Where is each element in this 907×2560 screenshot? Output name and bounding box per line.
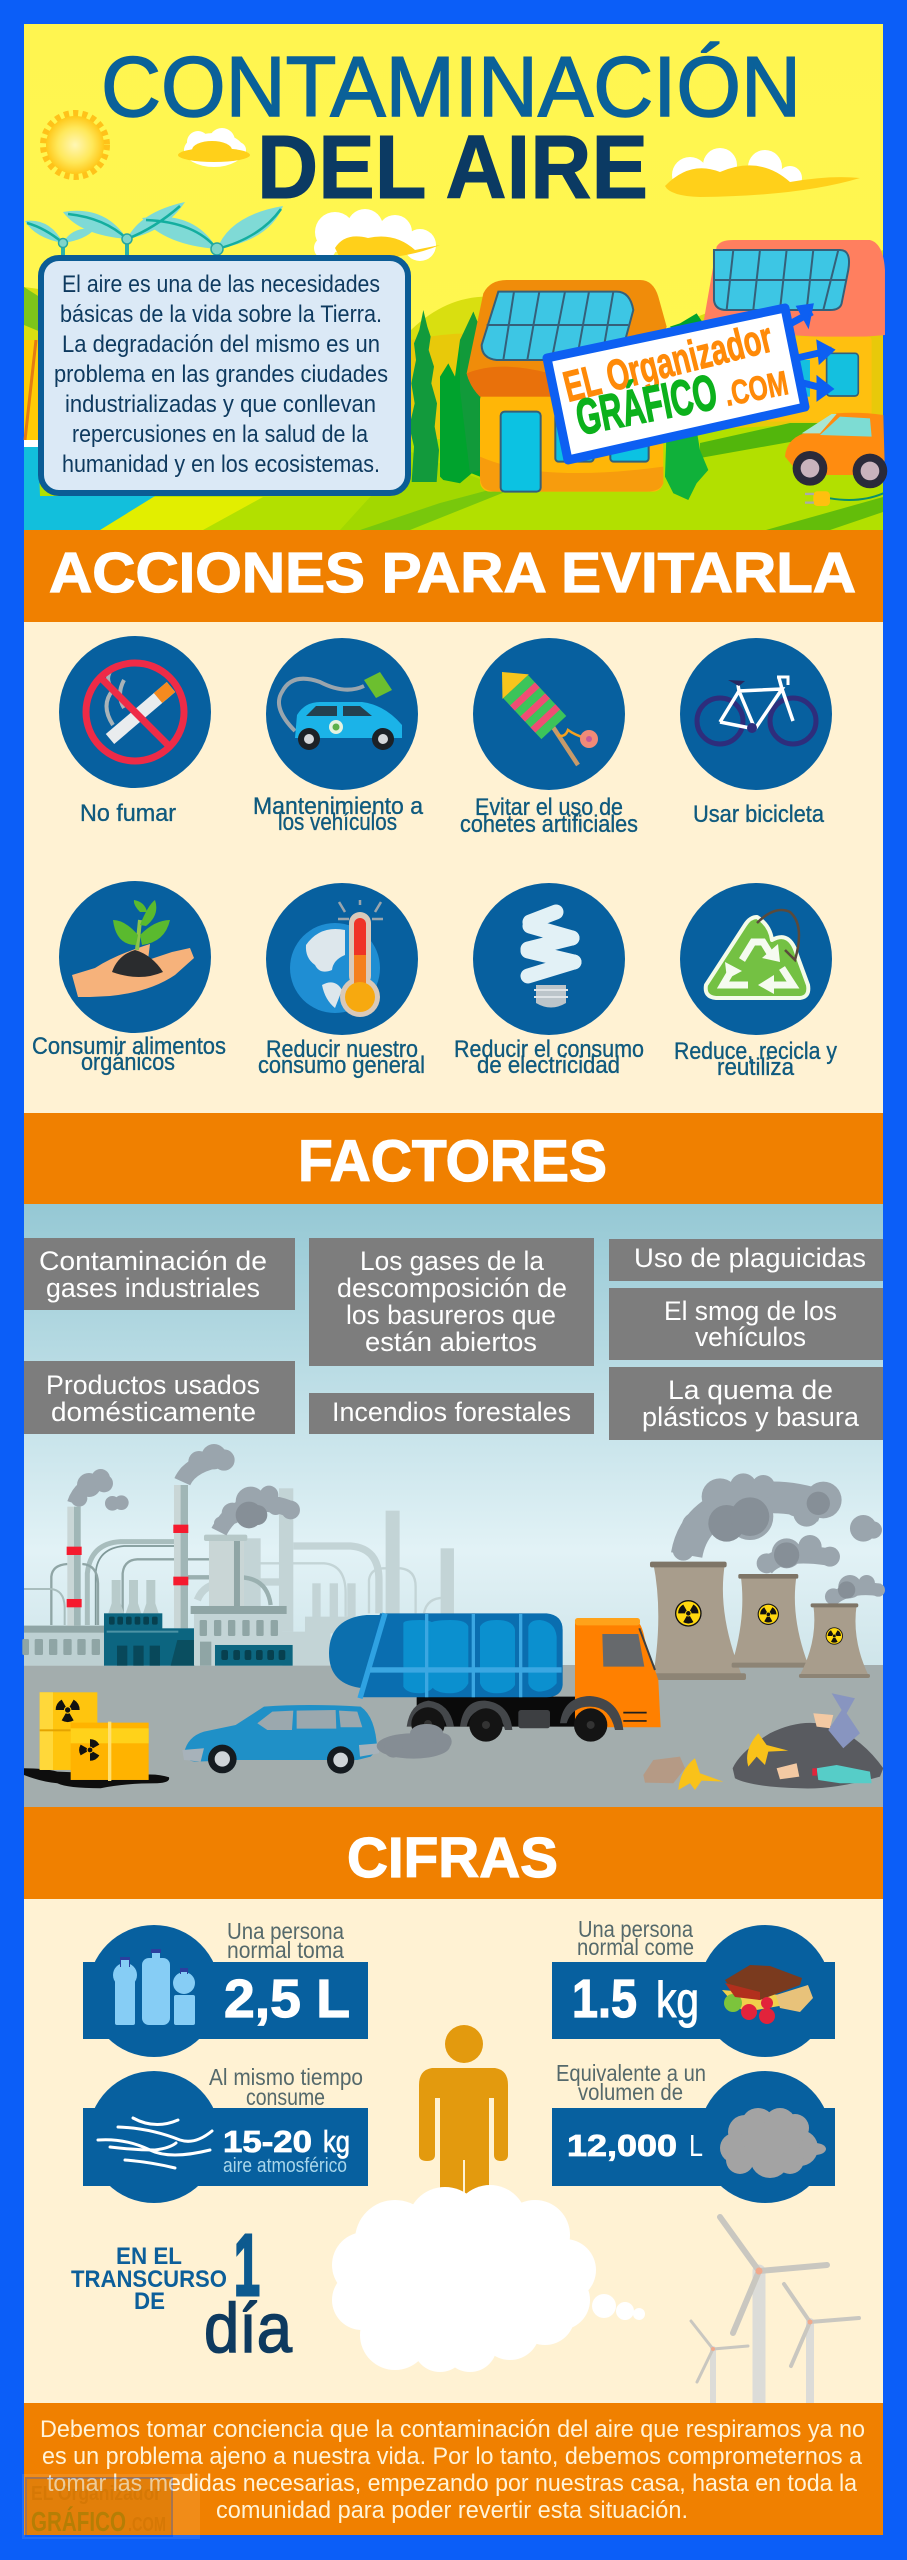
text: en el transcurso de 1 día: TRANSCURSO (71, 2266, 227, 2293)
stat: 1.5 kg comida (552, 1916, 835, 2057)
watermark logo: .COM (128, 2514, 166, 2536)
stat: 12,000 L (552, 2060, 835, 2203)
small stacks (108, 1580, 159, 1613)
icon: wind (98, 2118, 212, 2168)
trash pile (643, 1693, 883, 1790)
cooling towers (650, 1562, 870, 1680)
factor: productos domésticos: domésticamente (51, 1397, 256, 1427)
intro text box (41, 258, 408, 493)
watermark logo: GRÁFICO (31, 2506, 126, 2537)
factor boxes (24, 1238, 883, 1440)
action: electricidad (454, 883, 644, 1079)
icon: bottles (113, 1949, 195, 2025)
title: DEL AIRE (257, 118, 648, 218)
title (101, 40, 801, 218)
icon: person (419, 2025, 508, 2197)
stat: 2,5 L agua (83, 1918, 368, 2057)
factor: quema (609, 1367, 883, 1440)
action: cohetes (460, 638, 638, 838)
intro text box: problema en las grandes ciudades (54, 361, 388, 388)
action: no fumar: No fumar (80, 800, 176, 827)
intro text box: humanidad y en los ecosistemas. (62, 451, 380, 478)
factory smoke (71, 1444, 300, 1532)
factor: gases industriales: Contaminación de (39, 1246, 267, 1276)
stat: 15-20 kg aire: kg (323, 2124, 350, 2159)
barrels and oil (24, 1692, 169, 1788)
stat: 12,000 L: volumen de (578, 2079, 683, 2105)
text: en el transcurso de 1 día (71, 2217, 292, 2367)
factor: plaguicidas: Uso de plaguicidas (634, 1243, 866, 1273)
conclusion banner: es un problema ajeno a nuestra vida. Por lo tanto, debemos comprometernos a (42, 2443, 863, 2470)
chimneys (67, 1485, 188, 1628)
factor: quema: La quema de (668, 1375, 833, 1405)
panel: factores scene (22, 1204, 885, 1807)
stat: 15-20 kg aire: 15-20 (223, 2124, 312, 2159)
hills background (24, 250, 883, 530)
left building (22, 1626, 104, 1666)
logo: El Organizador Gráfico: EL Organizador (559, 314, 777, 412)
factor: quema: plásticos y basura (642, 1402, 860, 1432)
logo: El Organizador Gráfico: .COM (721, 364, 791, 414)
stat: 15-20 kg aire: Al mismo tiempo (209, 2064, 363, 2090)
action: electricidad: Reducir el consumo (454, 1036, 644, 1063)
garbage truck (329, 1613, 661, 1742)
action: consumo general: consumo general (258, 1052, 425, 1079)
icon: sun (44, 114, 106, 176)
factor: productos domésticos: Productos usados (46, 1370, 260, 1400)
intro text box: industrializadas y que conllevan (65, 391, 376, 418)
heading: cifras (24, 1807, 883, 1899)
action: recicla: reutiliza (717, 1054, 795, 1081)
icon: big white cloud (332, 2185, 645, 2372)
panel: acciones (24, 622, 883, 1113)
action: alimentos orgánicos: orgánicos (81, 1049, 175, 1076)
logo: El Organizador Gráfico: GRÁFICO (571, 364, 721, 446)
action: mantenimiento: los vehículos (278, 809, 397, 836)
action: bicicleta (680, 638, 832, 828)
factor: basureros: descomposición de (337, 1273, 567, 1303)
action: no fumar (59, 636, 211, 827)
factor: smog: El smog de los (664, 1296, 837, 1326)
action: mantenimiento (253, 638, 424, 836)
icon: left house (467, 280, 667, 492)
watermark logo (22, 2474, 200, 2539)
houses and car (409, 240, 887, 506)
stat: 1.5 kg comida: 1.5 (572, 1969, 637, 2029)
blue car (182, 1705, 380, 1774)
conclusion banner: Debemos tomar conciencia que la contaminación del aire que respiramos ya no (40, 2416, 865, 2443)
factor: productos domésticos (24, 1361, 295, 1434)
text: en el transcurso de 1 día: 1 (234, 2217, 260, 2314)
stat: 12,000 L: 12,000 (567, 2128, 677, 2163)
heading: acciones para evitarla: ACCIONES PARA EVITARLA (49, 541, 856, 605)
watermark logo: EL Organizador (31, 2483, 161, 2505)
factor: basureros (309, 1238, 594, 1366)
icon: wind turbines (691, 2217, 859, 2403)
teal and right buildings (104, 1606, 293, 1666)
action: cohetes: cohetes artificiales (460, 811, 638, 838)
action: alimentos orgánicos: Consumir alimentos (32, 1033, 226, 1060)
stat: 1.5 kg comida: Una persona (578, 1916, 693, 1942)
stat: 2,5 L agua: normal toma (227, 1937, 344, 1963)
text: en el transcurso de 1 día: EN EL (116, 2243, 182, 2270)
icon: gray cloud (720, 2108, 826, 2178)
text: en el transcurso de 1 día: día (204, 2289, 292, 2367)
factor: incendios (309, 1393, 594, 1434)
panel: hero scene (24, 24, 887, 531)
factor: basureros: los basureros que (346, 1300, 556, 1330)
heading: factores: FACTORES (298, 1129, 607, 1194)
factory complex (22, 1444, 454, 1788)
heading: acciones para evitarla (24, 530, 883, 622)
intro text box: El aire es una de las necesidades (62, 271, 380, 298)
intro text box: básicas de la vida sobre la Tierra. (60, 301, 382, 328)
factor: gases industriales: gases industriales (46, 1273, 260, 1303)
icon: electric car (785, 413, 887, 506)
pipes (24, 1542, 271, 1625)
factor: plaguicidas (609, 1239, 883, 1281)
stat: 15-20 kg aire (83, 2064, 368, 2203)
factor: basureros: Los gases de la (360, 1246, 545, 1276)
action: bicicleta: Usar bicicleta (693, 801, 825, 828)
conclusion banner: tomar las medidas necesarias, empezando por nuestras casa, hasta en toda la (47, 2470, 858, 2497)
background silhouettes (24, 1488, 454, 1666)
intro text box: La degradación del mismo es un (62, 331, 380, 358)
icon: food (722, 1965, 813, 2024)
right side scene (329, 1473, 885, 1790)
stat: 2,5 L agua: 2,5 L (224, 1969, 350, 2029)
logo: El Organizador Gráfico (547, 305, 833, 460)
stat: 1.5 kg comida: normal come (577, 1934, 694, 1960)
icon: clouds (178, 128, 860, 261)
action: consumo general (258, 883, 425, 1079)
icon: trees (409, 310, 708, 500)
icon: right house (703, 240, 885, 422)
heading: cifras: CIFRAS (347, 1826, 558, 1890)
intro text box: repercusiones en la salud de la (72, 421, 369, 448)
tank (204, 1535, 247, 1607)
stat: 1.5 kg comida: kg (656, 1972, 699, 2028)
action: recicla (674, 883, 837, 1081)
icon: wind turbines hero (25, 202, 283, 258)
heading: factores (24, 1113, 883, 1204)
power plant smoke (673, 1473, 885, 1605)
factor: smog: vehículos (695, 1322, 806, 1352)
action: alimentos orgánicos (32, 881, 226, 1076)
conclusion banner: comunidad para poder revertir esta situación. (216, 2497, 688, 2524)
title: CONTAMINACIÓN (101, 40, 801, 135)
factor: gases industriales (24, 1238, 295, 1310)
action: electricidad: de electricidad (477, 1052, 620, 1079)
conclusion banner (22, 2403, 883, 2539)
factor: smog (609, 1288, 883, 1360)
stat: 12,000 L: L (689, 2128, 703, 2163)
factor: incendios: Incendios forestales (332, 1397, 571, 1427)
action: cohetes: Evitar el uso de (475, 794, 623, 821)
stat: 15-20 kg aire: aire atmosférico (223, 2155, 347, 2177)
text: en el transcurso de 1 día: DE (134, 2288, 165, 2315)
action: consumo general: Reducir nuestro (266, 1036, 418, 1063)
action: mantenimiento: Mantenimiento a (253, 793, 424, 820)
factor: basureros: están abiertos (365, 1327, 537, 1357)
stat: 12,000 L: Equivalente a un (556, 2060, 706, 2086)
panel: cifras (24, 1899, 883, 2403)
stat: 2,5 L agua: Una persona (227, 1918, 344, 1944)
action: recicla: Reduce, recicla y (674, 1038, 837, 1065)
truck exhaust (377, 1724, 452, 1759)
stat: 15-20 kg aire: consume (246, 2084, 325, 2110)
